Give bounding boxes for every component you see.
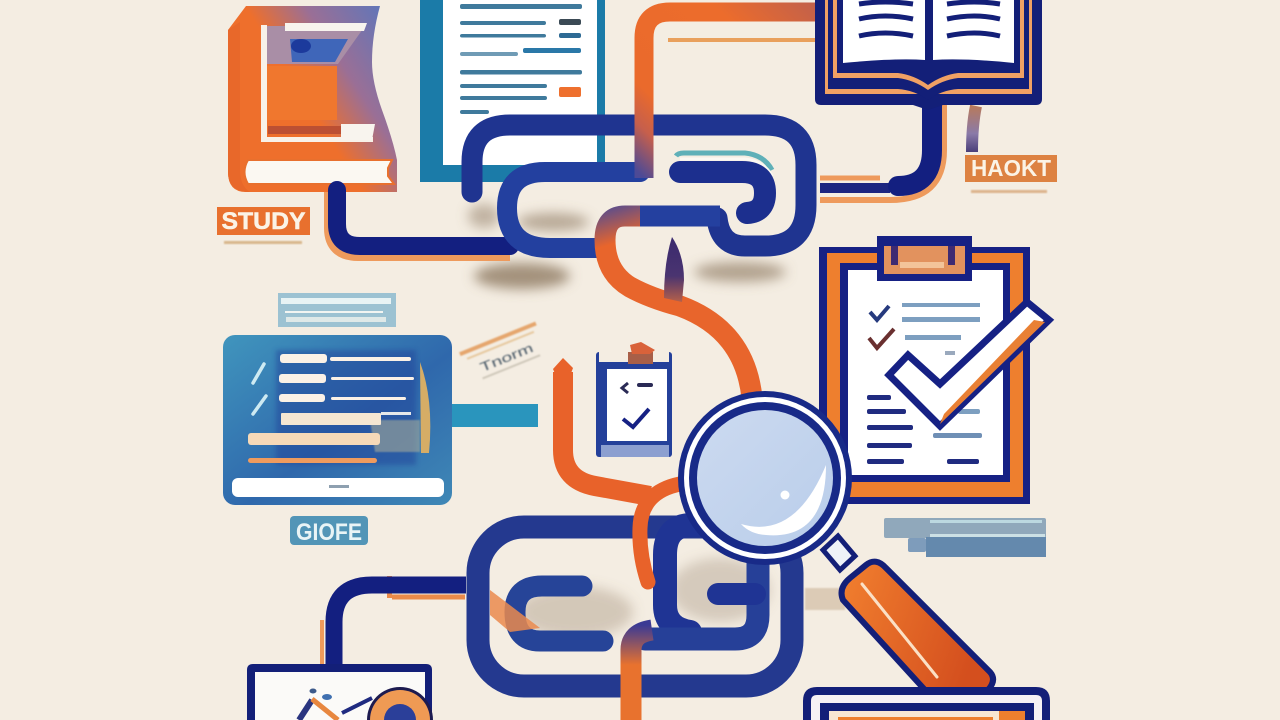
clipboard clip [877, 236, 972, 281]
connector: orange line from chain to open book [644, 12, 816, 178]
icon: closed book [228, 6, 397, 192]
text label: blue: GIOFE [296, 519, 362, 546]
magnifier lens [697, 410, 833, 546]
icon: bottom right screen [803, 687, 1050, 720]
text label: top right [965, 155, 1057, 193]
link: left hook [515, 586, 603, 641]
list tick marks [253, 364, 266, 414]
big check mark [889, 302, 1049, 426]
clipboard [819, 236, 1049, 504]
connector: open book to chain [820, 100, 944, 200]
magnifier neck [823, 536, 855, 570]
link: right stub [718, 583, 755, 605]
magnifier [678, 391, 993, 690]
accent: teal band [676, 153, 772, 170]
small clipboard icon [596, 342, 672, 457]
chain: upper links [472, 125, 806, 248]
amber side bar [420, 362, 430, 453]
magnifier ring [678, 391, 852, 565]
document panel [420, 0, 605, 182]
icon: picture box [247, 664, 433, 720]
small top-left bar panel [278, 293, 396, 327]
shadow wedge behind handle [805, 588, 845, 610]
list rows [248, 354, 414, 463]
text label: top right: HAOKT [971, 155, 1051, 181]
right bar label [884, 518, 1046, 557]
link: middle bar [640, 206, 720, 226]
connector: book to chain [333, 190, 510, 252]
checklist ticks [869, 306, 894, 348]
magnifier handle [842, 562, 993, 690]
handwritten note [459, 322, 548, 384]
icon: open book [815, 0, 1042, 110]
text label: study: STUDY [222, 208, 306, 235]
link: right hook [645, 560, 758, 639]
link: left loop [507, 172, 640, 248]
connector: orange down line [631, 630, 652, 720]
soft shadows under chain [468, 204, 786, 638]
handwritten note: Tnorm [478, 340, 535, 375]
lens highlight [741, 465, 826, 535]
spike: navy tip [664, 237, 684, 302]
link: large outer loop [478, 527, 792, 686]
panel: blue list screen [223, 335, 452, 505]
connector: purple drop to label [972, 106, 976, 152]
text label: study [217, 207, 310, 244]
connector: orange snake to magnifier [605, 216, 752, 398]
accent: orange blob [490, 590, 540, 632]
chain: lower links [478, 525, 792, 686]
connector: orange left riser [553, 358, 650, 496]
link: right loop [665, 525, 720, 632]
link: inner hook [680, 172, 765, 213]
connector: teal bar [452, 404, 538, 427]
checklist lines [867, 303, 982, 464]
connector: bottom left [322, 576, 466, 666]
accent: white band under teal [680, 159, 772, 176]
connector: orange loop near magnifier [640, 484, 680, 582]
link: large outer loop [472, 125, 806, 246]
